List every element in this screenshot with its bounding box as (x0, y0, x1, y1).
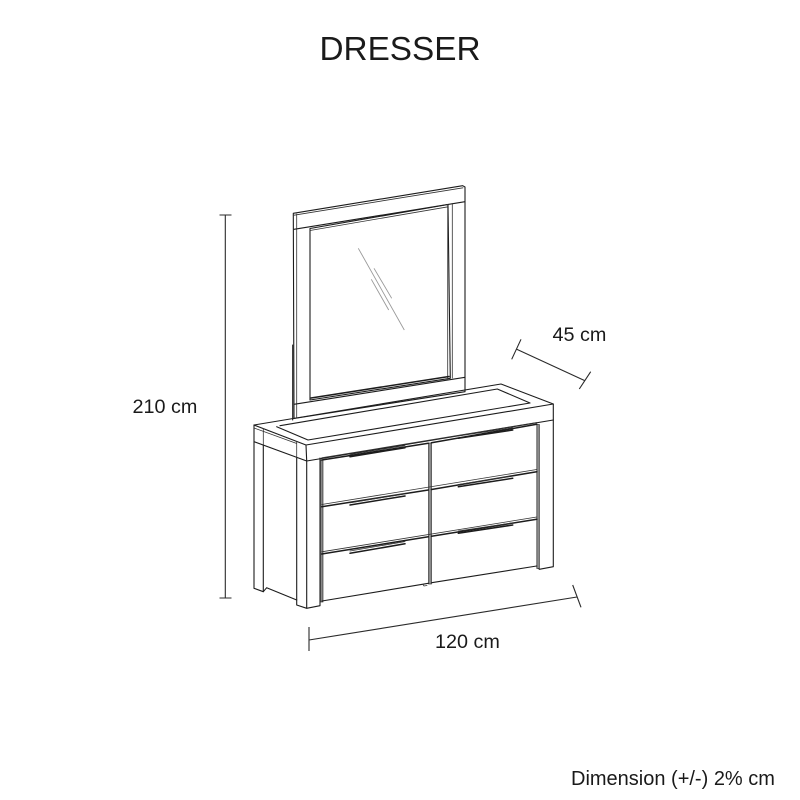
drawer handles (350, 428, 513, 553)
dimension: width: 120 cm (435, 631, 500, 653)
title: DRESSER (320, 31, 480, 68)
dimension: depth: 45 cm (552, 324, 606, 346)
mirror (293, 186, 465, 420)
dresser body (254, 384, 553, 608)
left side panel and legs (254, 442, 320, 608)
dresser top (254, 384, 553, 461)
dimension: height: 210 cm (132, 396, 197, 418)
mirror reflection lines (358, 248, 404, 330)
drawer fronts (320, 422, 537, 602)
dimension: width (309, 585, 581, 653)
footnote: Dimension (+/-) 2% cm (571, 768, 775, 790)
dimension: depth (512, 324, 606, 389)
right leg (537, 420, 553, 569)
dimension: height (132, 215, 232, 598)
